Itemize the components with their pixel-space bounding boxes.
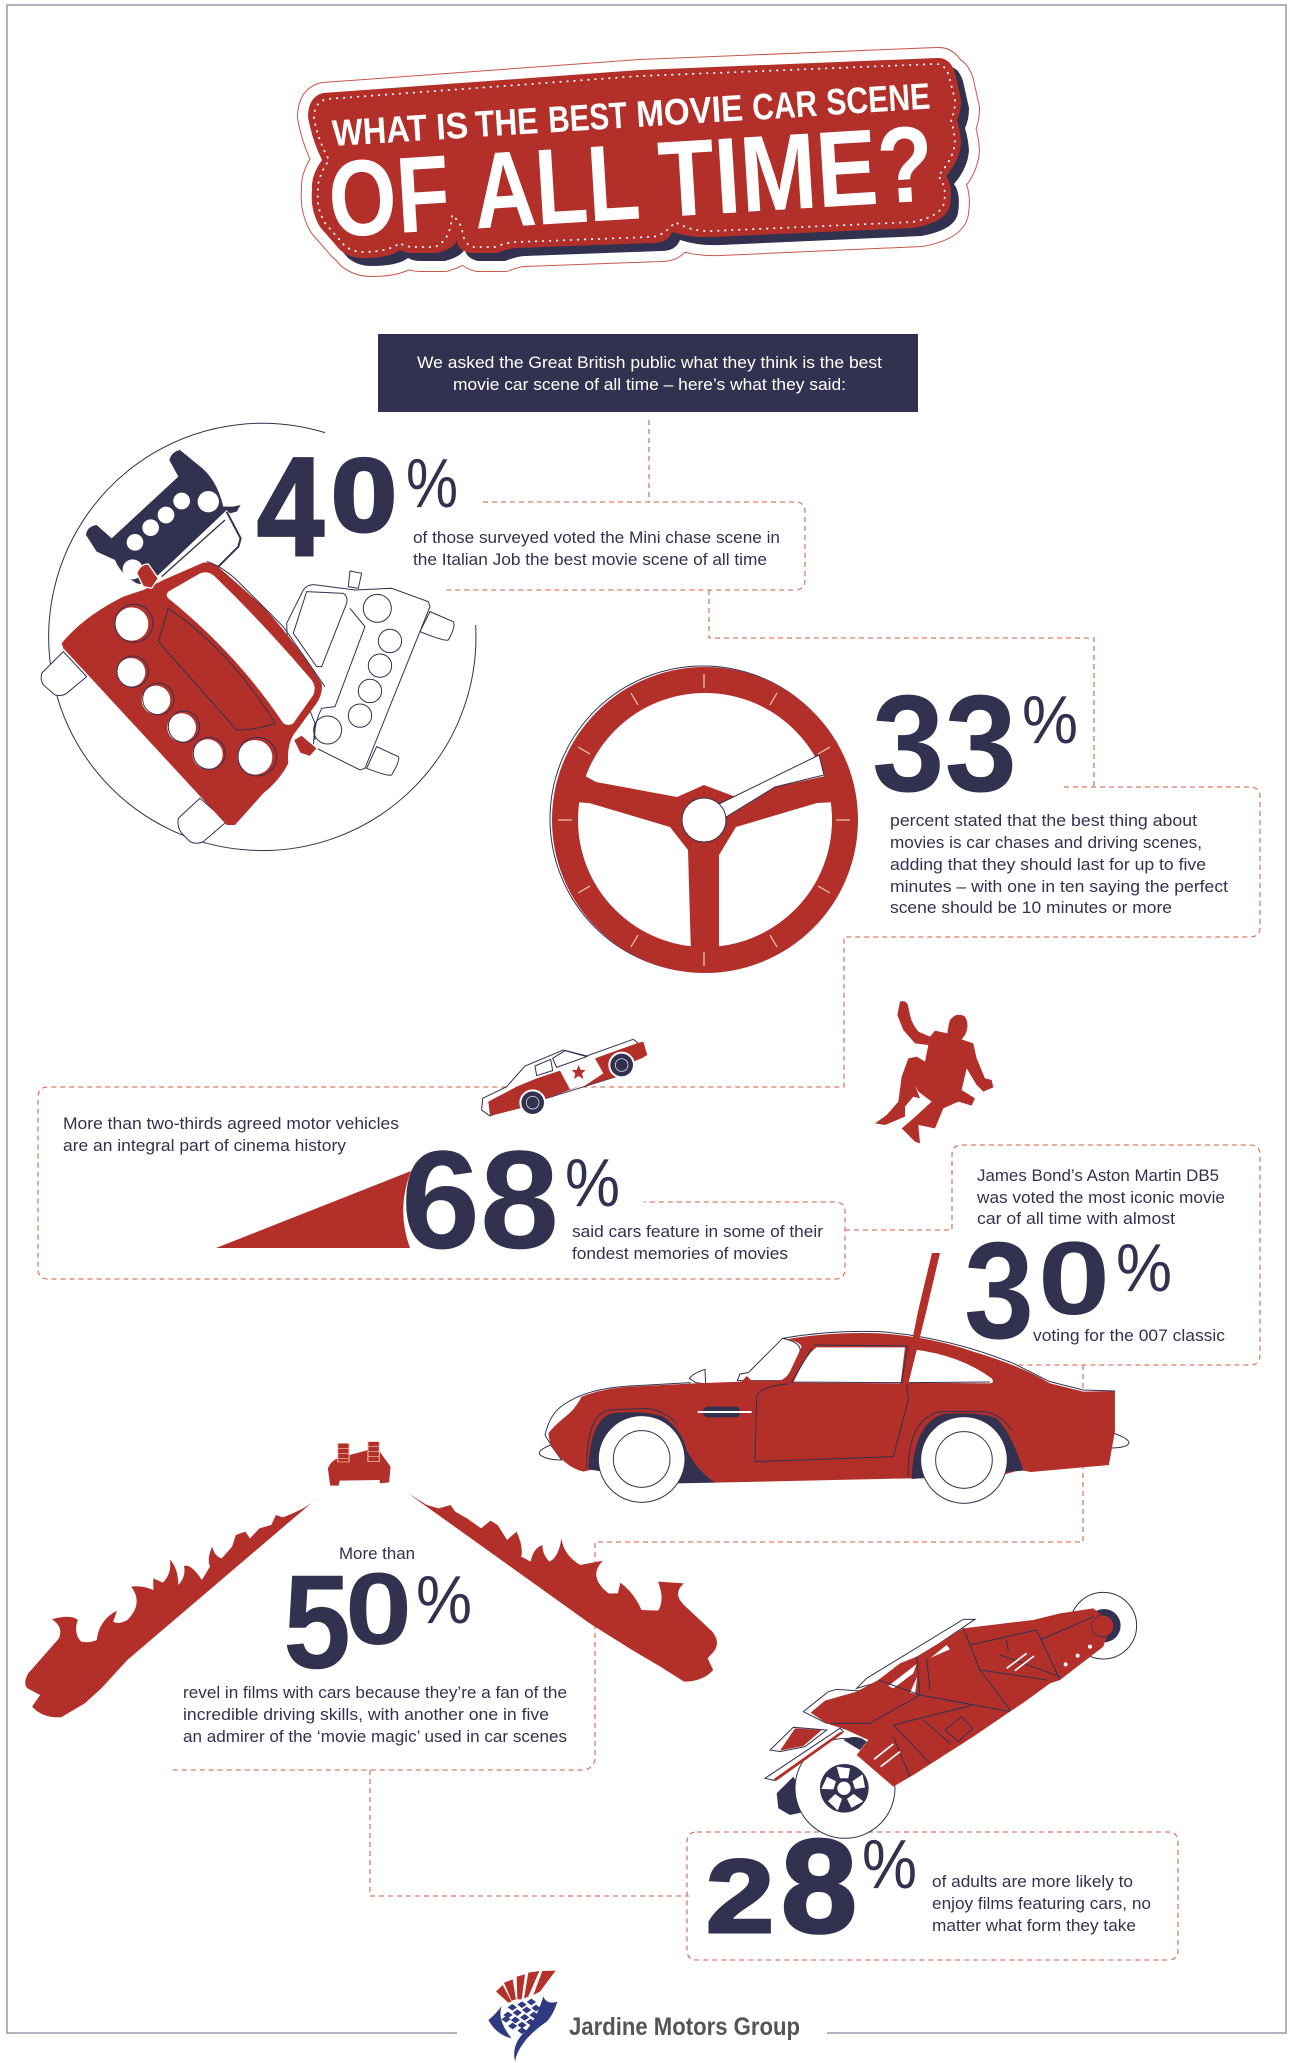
stat: 40 percent <box>257 428 780 585</box>
title line one: CAR <box>751 83 818 128</box>
stat: 40 percent: 0 <box>331 438 397 554</box>
stat: 30 percent: % <box>1116 1230 1172 1306</box>
icon: right flame <box>408 1493 717 1682</box>
illustration: falling man silhouette <box>875 1001 993 1143</box>
title line one <box>331 76 931 154</box>
illustration: armoured batmobile <box>765 1592 1137 1838</box>
title line one: MOVIE <box>635 87 744 135</box>
stat: 33 percent: adding that they should last for up to five <box>890 855 1206 874</box>
icon: navy mini car <box>86 450 241 585</box>
icon: left flame <box>25 1498 317 1717</box>
icon: star <box>572 1065 586 1079</box>
title line two: TIME? <box>655 102 937 240</box>
icon: thistle <box>488 1971 557 2062</box>
stat: 68 percent: said cars feature in some of their <box>572 1222 823 1241</box>
title line one: THE <box>474 100 539 145</box>
dashed connector path <box>38 420 1260 1960</box>
stat: 50 percent: % <box>416 1562 472 1638</box>
stat: 28 percent: % <box>862 1825 917 1903</box>
intro box: We asked the Great British public what they think is the best <box>417 353 882 372</box>
illustration: car with flame trails <box>25 1442 717 1717</box>
stat: 28 percent: enjoy films featuring cars, no <box>932 1894 1151 1913</box>
logo: Jardine Motors Group <box>488 1971 800 2062</box>
stat: 28 percent: of adults are more likely to <box>932 1872 1133 1891</box>
stat: 30 percent: 3 <box>964 1214 1034 1368</box>
stat: 30 percent: was voted the most iconic movie <box>976 1188 1225 1207</box>
stat: 68 percent: are an integral part of cinema history <box>63 1136 347 1155</box>
title line two: OF <box>325 132 453 260</box>
stat: 40 percent: of those surveyed voted the Mini chase scene in <box>413 528 780 547</box>
title line two <box>325 102 937 260</box>
stat: 68 percent: 68 <box>401 1121 559 1278</box>
title line one: IS <box>435 105 469 148</box>
stat: 68 percent <box>63 1114 823 1278</box>
stat: 33 percent: scene should be 10 minutes or more <box>890 898 1172 917</box>
stat: 33 percent <box>872 667 1228 917</box>
title line one: WHAT <box>331 107 429 154</box>
stat: 28 percent: 2 <box>706 1839 774 1955</box>
illustration: small jumping car <box>482 1039 647 1116</box>
stat: 68 percent: % <box>565 1145 620 1221</box>
stat: 50 percent: 5 <box>283 1548 351 1697</box>
stat: 50 percent: revel in films with cars because they’re a fan of the <box>183 1683 567 1702</box>
stat: 30 percent: James Bond’s Aston Martin DB5 <box>977 1166 1219 1185</box>
stat: 28 percent: matter what form they take <box>932 1916 1136 1935</box>
stat: 33 percent: 33 <box>872 667 1017 821</box>
title badge <box>308 58 969 266</box>
stat: 50 percent: More than <box>339 1544 415 1563</box>
logo: Jardine Motors Group: Jardine Motors Group <box>569 2013 800 2041</box>
stat: 50 percent: incredible driving skills, with another one in five <box>183 1705 549 1724</box>
illustration: three mini cars in circle <box>41 423 476 851</box>
icon: outlined mini car <box>287 571 454 775</box>
stat: 28 percent: 8 <box>781 1813 857 1961</box>
illustration: steering wheel <box>550 666 856 972</box>
stat: 30 percent: 0 <box>1038 1221 1110 1337</box>
stat: 50 percent: 0 <box>345 1552 412 1666</box>
intro box <box>378 334 918 412</box>
stat: 33 percent: percent stated that the best thing about <box>890 811 1197 830</box>
stat: 30 percent: voting for the 007 classic <box>1033 1326 1226 1345</box>
stat: 40 percent: % <box>406 444 458 522</box>
stat: 28 percent <box>706 1813 1151 1961</box>
stat: 50 percent <box>183 1544 567 1746</box>
stat: 68 percent: fondest memories of movies <box>572 1244 788 1263</box>
intro box: movie car scene of all time – here’s what they said: <box>453 375 846 394</box>
stat: 33 percent: % <box>1022 682 1078 758</box>
title line one: SCENE <box>825 76 931 123</box>
icon: car rear <box>328 1442 391 1486</box>
stat: 30 percent: car of all time with almost <box>977 1209 1175 1228</box>
wedge graphic <box>216 1171 411 1248</box>
title line one: BEST <box>547 95 629 140</box>
stat: 33 percent: minutes – with one in ten saying the perfect <box>890 877 1228 896</box>
illustration: Aston Martin DB5 <box>539 1253 1129 1503</box>
stat: 40 percent: 4 <box>257 428 324 585</box>
title line two: ALL <box>470 121 643 251</box>
stat: 68 percent: More than two-thirds agreed motor vehicles <box>63 1114 399 1133</box>
stat: 33 percent: movies is car chases and driving scenes, <box>890 833 1202 852</box>
stat: 40 percent: the Italian Job the best movie scene of all time <box>413 550 767 569</box>
stat: 30 percent <box>964 1166 1226 1368</box>
icon: red mini car <box>41 562 325 843</box>
stat: 50 percent: an admirer of the ‘movie magic’ used in car scenes <box>183 1727 567 1746</box>
